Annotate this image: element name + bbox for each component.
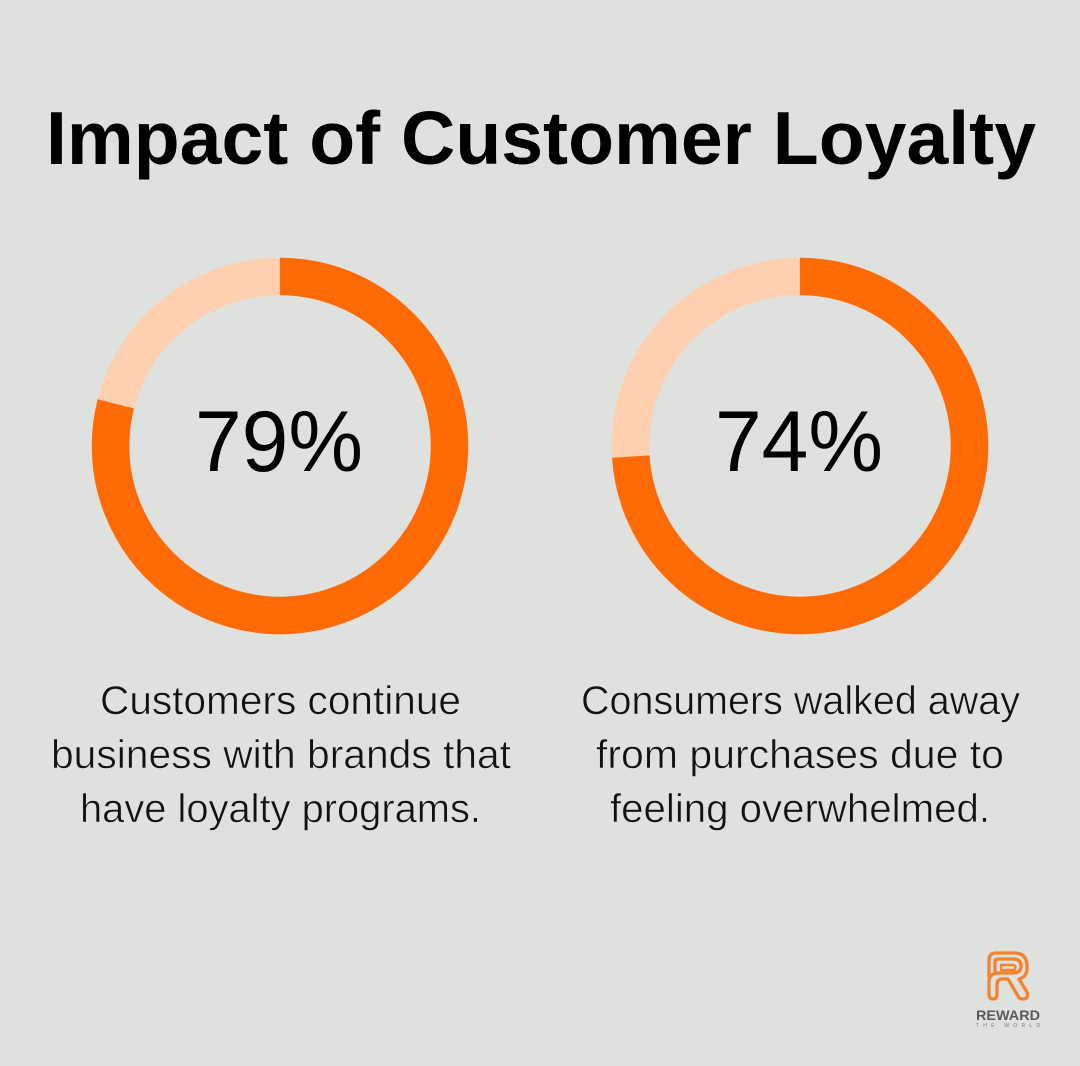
logo wordmark: REWARD — [976, 1007, 1040, 1023]
stat value: 74%: 74% — [715, 394, 883, 490]
description: consumers: Consumers walked away — [581, 679, 1020, 723]
description: consumers: from purchases due to — [596, 733, 1004, 777]
panel: 79% customers — [51, 276, 511, 831]
description: customers: business with brands that — [51, 733, 511, 777]
logo tagline: THE WORLD — [976, 1023, 1040, 1029]
panel: 74% consumers — [581, 276, 1020, 831]
icon: R mark — [989, 953, 1028, 999]
donut chart: 79% — [110, 276, 450, 616]
title: Impact of Customer Loyalty — [46, 96, 1036, 180]
stat value: 79%: 79% — [195, 394, 363, 490]
description: customers — [51, 679, 511, 831]
description: customers: Customers continue — [100, 679, 461, 723]
donut chart: 74% — [630, 276, 970, 616]
description: consumers: feeling overwhelmed. — [610, 787, 990, 831]
logo: Reward the World — [976, 953, 1040, 1029]
description: customers: have loyalty programs. — [80, 787, 481, 831]
description: consumers — [581, 679, 1020, 831]
